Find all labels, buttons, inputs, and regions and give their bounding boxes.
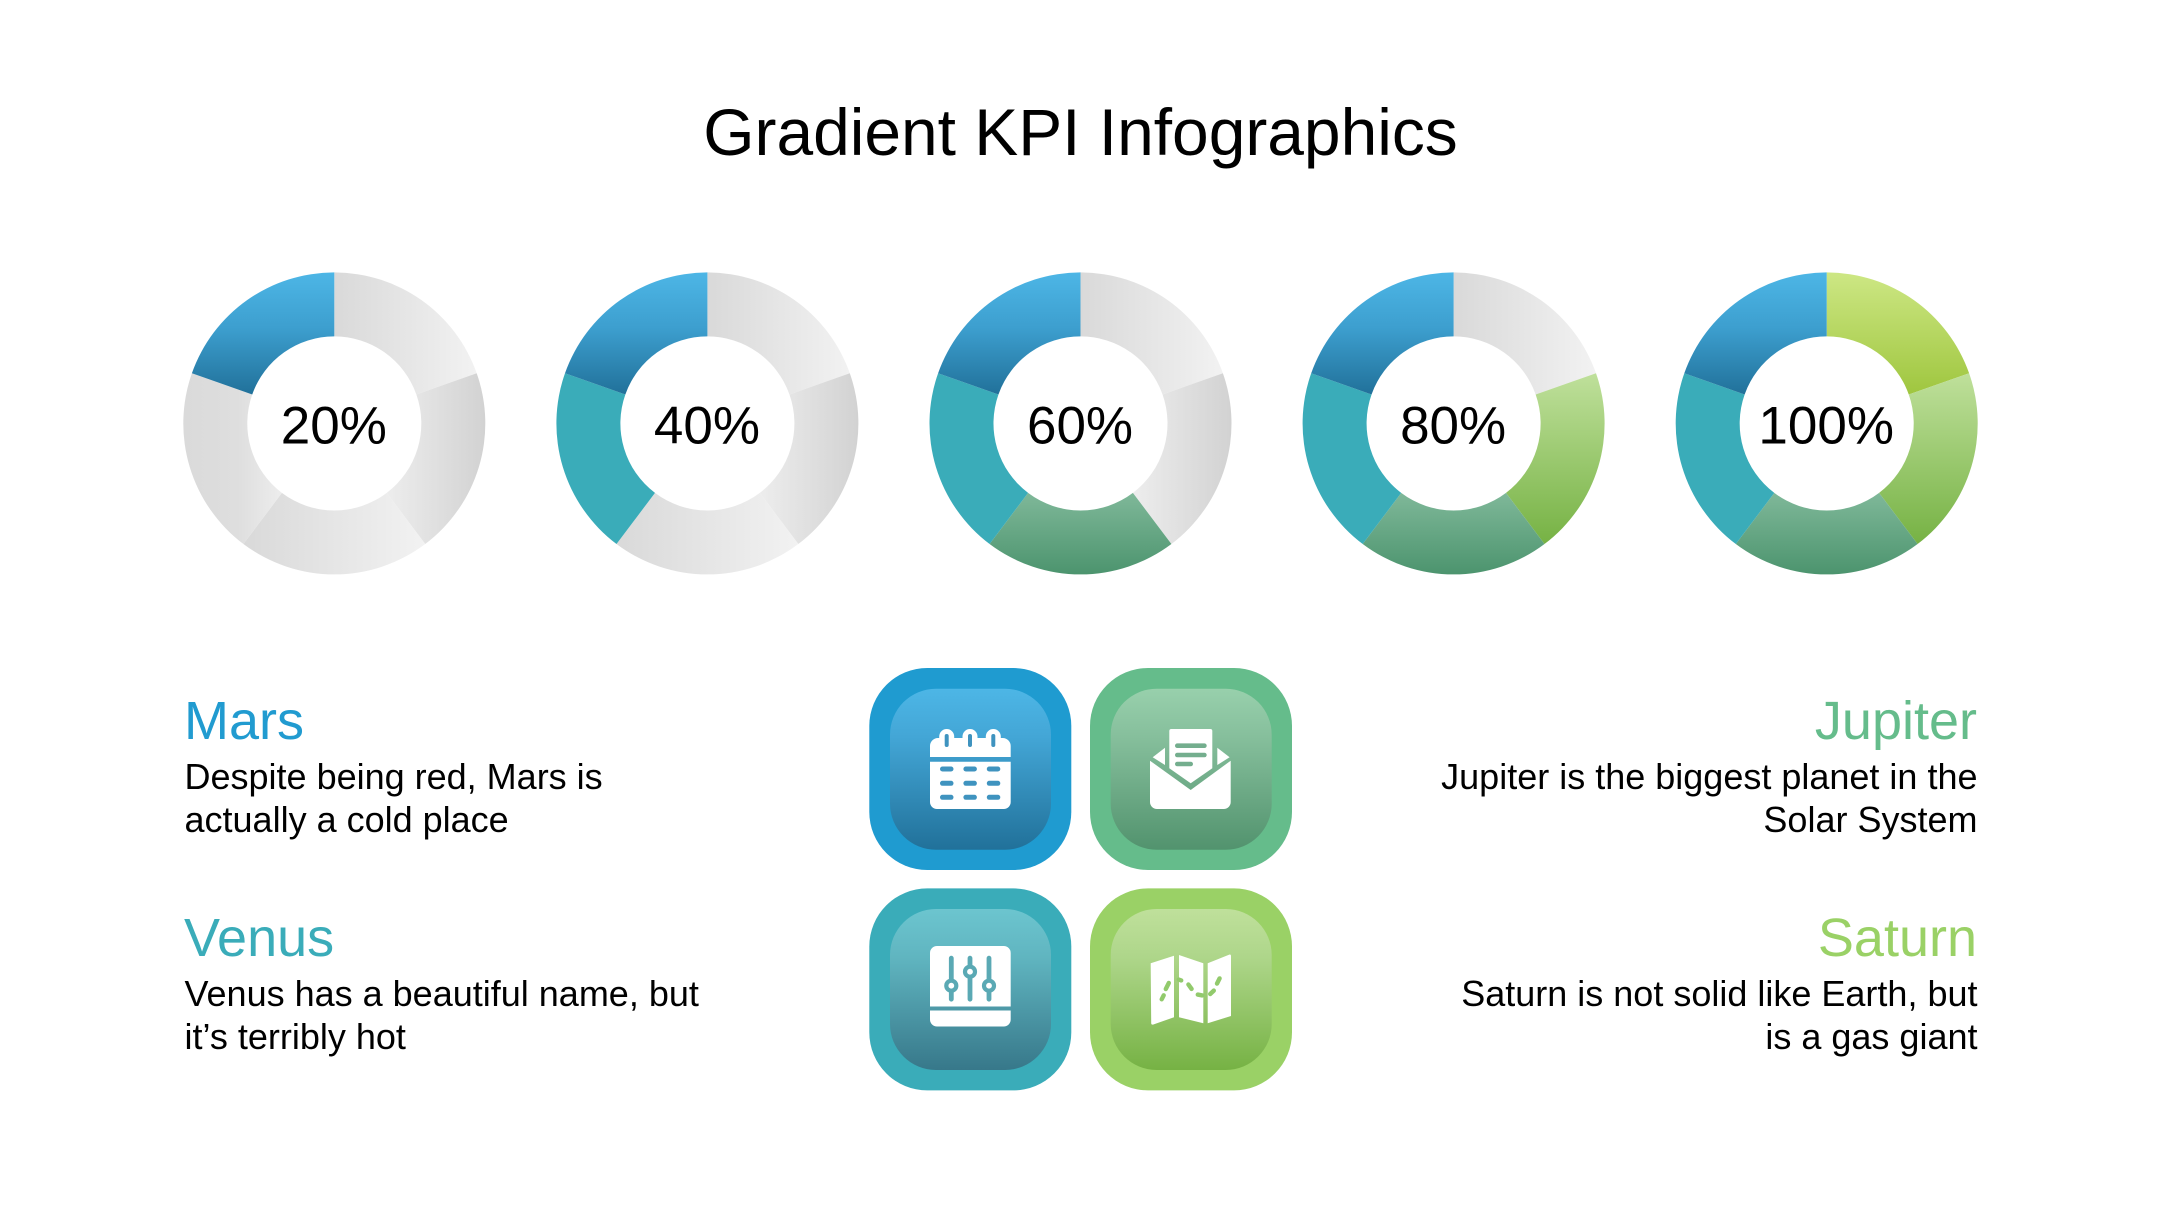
text block: Mars	[184, 691, 603, 840]
text block: Mars: Mars	[184, 691, 304, 751]
text block: Jupiter: Solar System	[1763, 799, 1978, 840]
text block: Mars: actually a cold place	[184, 799, 509, 840]
text block: Mars: Despite being red, Mars is	[184, 756, 603, 797]
icon tile: folded map	[1090, 888, 1292, 1090]
text block: Saturn	[1461, 908, 1978, 1057]
donut chart: 80%: 80%	[1400, 396, 1506, 455]
text block: Venus: Venus	[184, 908, 334, 968]
donut chart: 20%	[183, 272, 485, 574]
text block: Venus: Venus has a beautiful name, but	[184, 973, 699, 1014]
text block: Jupiter	[1441, 691, 1978, 840]
text block: Jupiter: Jupiter is the biggest planet in the	[1441, 756, 1978, 797]
donut chart: 80%	[1303, 272, 1605, 574]
text block: Saturn: Saturn is not solid like Earth, but	[1461, 973, 1978, 1014]
donut chart: 20%: 20%	[281, 396, 387, 455]
donut chart: 60%	[930, 272, 1231, 574]
donut chart: 100%	[1676, 272, 1978, 574]
title: Gradient KPI Infographics	[703, 95, 1458, 169]
donut chart: 40%: 40%	[654, 396, 760, 455]
text block: Venus: it’s terribly hot	[184, 1016, 406, 1057]
icon tile: calendar	[869, 668, 1071, 870]
donut chart: 40%	[556, 272, 858, 574]
text block: Saturn: Saturn	[1818, 908, 1977, 968]
text block: Jupiter: Jupiter	[1815, 691, 1977, 751]
text block: Saturn: is a gas giant	[1765, 1016, 1978, 1057]
donut chart: 60%: 60%	[1027, 396, 1133, 455]
text block: Venus	[184, 908, 699, 1057]
icon tile: sliders	[869, 888, 1071, 1090]
donut chart: 100%: 100%	[1758, 396, 1894, 455]
icon tile: open envelope	[1090, 668, 1292, 870]
